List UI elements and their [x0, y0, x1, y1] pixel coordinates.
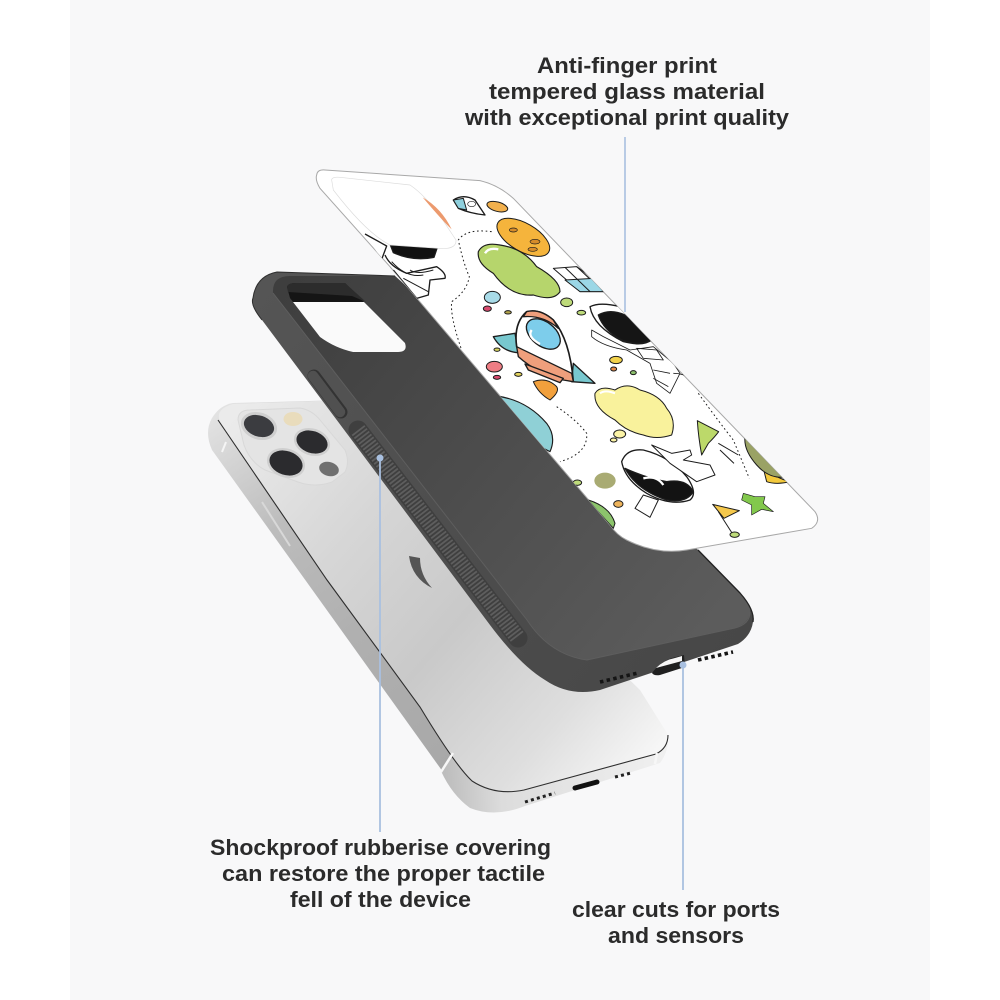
case rim [252, 272, 753, 692]
callout line: ports [680, 662, 686, 890]
phone: silver back [208, 400, 668, 813]
print: green star [742, 493, 773, 515]
phone corner and bottom side [441, 735, 668, 813]
lens top [237, 407, 281, 445]
print: olive planet [745, 437, 790, 483]
callout line: glass [624, 137, 626, 312]
lens right [290, 423, 334, 461]
camera cutout [287, 283, 406, 352]
callout: glass: Anti-finger print [537, 53, 718, 78]
bottom speaker and port [525, 773, 631, 802]
print: top astronaut [365, 234, 445, 298]
print: upper right astronaut [590, 304, 690, 393]
print: green cloud [478, 244, 560, 298]
phone body side [208, 400, 460, 780]
callout: glass: with exceptional print quality [464, 105, 790, 130]
infographic canvas [208, 57, 818, 943]
print: central rocket [493, 311, 595, 383]
camera bump [237, 407, 348, 485]
callout: ports: and sensors [608, 923, 744, 948]
side button [262, 502, 290, 546]
print: rocket flame [533, 380, 557, 400]
rubber case [252, 272, 753, 692]
print: small bubbles [483, 291, 636, 507]
speaker holes left [600, 673, 638, 682]
charging port cutout [652, 655, 685, 675]
volume button [313, 376, 341, 412]
callout: glass: tempered glass material [489, 79, 765, 104]
flash [284, 412, 302, 426]
phone back face [219, 400, 668, 792]
callout: rubber covering: Shockproof rubberise covering [210, 835, 551, 860]
callout: rubber covering [210, 835, 551, 912]
logo [409, 556, 432, 588]
callout: ports [572, 897, 780, 948]
case inner face [273, 276, 750, 660]
grip strip [358, 430, 518, 638]
tempered glass panel [316, 170, 818, 551]
callout: glass [464, 53, 790, 130]
callout: rubber covering: fell of the device [290, 887, 471, 912]
print: orange moon [496, 218, 550, 257]
print: camera area ring [332, 177, 456, 249]
print: dotted path [451, 231, 749, 478]
callout: rubber covering: can restore the proper tactile [222, 861, 545, 886]
lens bottom [263, 443, 309, 483]
speaker holes right [698, 652, 733, 660]
print: orange sliver [423, 197, 452, 229]
print: yellow cloud [595, 386, 673, 437]
print: green cone [697, 421, 738, 463]
print: green planet [588, 500, 615, 528]
print: lower astronaut [622, 445, 715, 517]
callout line: rubber covering [376, 454, 384, 832]
print: window box [553, 267, 603, 292]
print: small orange planet [486, 200, 508, 212]
print: small rocket [453, 197, 485, 215]
callout: ports: clear cuts for ports [572, 897, 780, 922]
print: teal planet [500, 396, 554, 452]
lidar sensor [318, 460, 340, 478]
print: flag [713, 504, 739, 537]
